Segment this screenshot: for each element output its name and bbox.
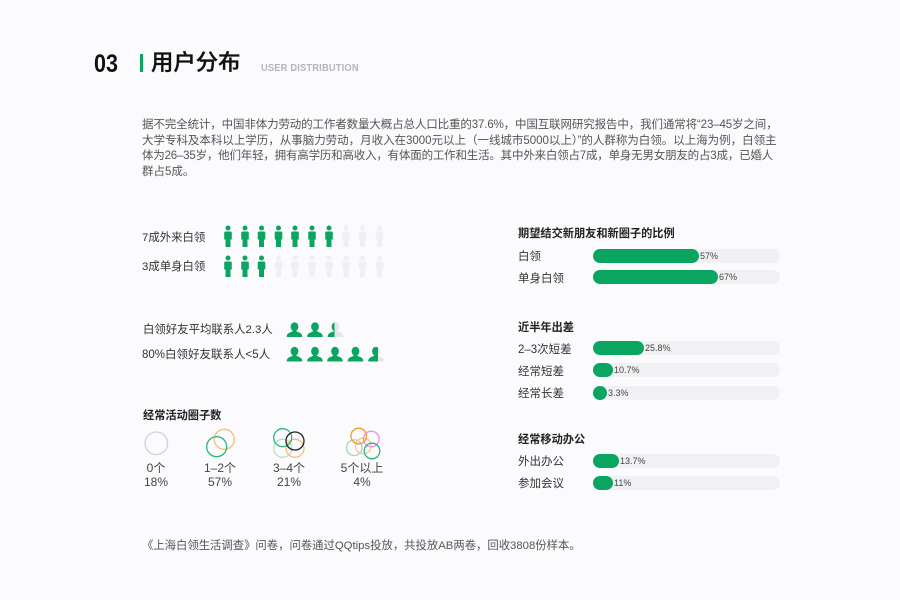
intro paragraph: 大学专科及本科以上学历，从事脑力劳动，月收入在3000元以上（一线城市5000以上）”的人群称为白领。以上海为例，白领主 — [142, 135, 777, 147]
stat: one to two groups — [204, 461, 236, 489]
stat: one to two groups: 57% — [208, 475, 232, 489]
heading: business trips: 近半年出差 — [518, 322, 574, 334]
circles: five or more groups — [346, 428, 380, 459]
stat: zero groups — [144, 461, 168, 489]
bar: 10.7% — [593, 363, 780, 377]
stat: three to four groups: 3–4个 — [273, 461, 305, 475]
bar: white-collar 57%: 57% — [700, 251, 718, 261]
label: average contacts: 白领好友平均联系人2.3人 — [143, 324, 273, 336]
circles: one to two groups — [207, 429, 234, 457]
bar: 25.8% — [593, 341, 780, 355]
bar: 3.3% — [593, 386, 780, 400]
pictogram: 3 of 10 single white-collar — [224, 256, 383, 277]
row label: 经常短差 — [518, 366, 564, 378]
bar: single 67%: 67% — [719, 272, 737, 282]
bar: 10.7%: 10.7% — [614, 365, 640, 375]
heading: expectation: 期望结交新朋友和新圈子的比例 — [518, 228, 675, 240]
stat: five or more groups — [341, 461, 383, 489]
heading: circles: 经常活动圈子数 — [143, 410, 221, 422]
row label: 白领 — [518, 251, 541, 263]
intro paragraph: 据不完全统计，中国非体力劳动的工作者数量大概占总人口比重的37.6%，中国互联网研究报告中，我们通常将“23–45岁之间， — [142, 119, 777, 131]
stat: three to four groups — [273, 461, 305, 489]
stat: five or more groups: 4% — [353, 475, 371, 489]
stat: zero groups: 0个 — [147, 461, 165, 475]
bar: 3.3%: 3.3% — [608, 388, 629, 398]
intro paragraph: 体为26–35岁，他们年轻，拥有高学历和高收入，有体面的工作和生活。其中外来白领占7成，单身无男女朋友的占3成，已婚人 — [142, 150, 773, 162]
stat: five or more groups: 5个以上 — [341, 461, 383, 475]
bar: 11%: 11% — [614, 478, 631, 488]
intro paragraph — [142, 118, 777, 178]
bar: 13.7%: 13.7% — [620, 456, 646, 466]
bar: 11% — [593, 476, 780, 490]
label: contacts under five: 80%白领好友联系人<5人 — [142, 349, 270, 361]
circles: zero groups — [145, 432, 168, 455]
title accent bar — [140, 54, 143, 72]
row label: 参加会议 — [518, 478, 564, 490]
bar: single 67% — [593, 270, 780, 284]
heading: mobile work: 经常移动办公 — [518, 434, 585, 446]
circles: three to four groups — [274, 429, 304, 457]
intro paragraph: 群占5成。 — [142, 166, 194, 178]
source note: 《上海白领生活调查》问卷，问卷通过QQtips投放，共投放AB两卷，回收3808份样本。 — [142, 540, 581, 552]
pictogram: 80 percent under 5 contacts — [287, 347, 384, 362]
pictogram: 7 of 10 migrant white-collar — [224, 226, 383, 247]
row label: 经常长差 — [518, 388, 564, 400]
label: single: 3成单身白领 — [142, 261, 205, 273]
row label: 外出办公 — [518, 456, 564, 468]
bar: white-collar 57% — [593, 249, 780, 263]
section number: 03 — [94, 50, 118, 78]
bar: 25.8%: 25.8% — [645, 343, 671, 353]
row label: 单身白领 — [518, 273, 564, 285]
stat: one to two groups: 1–2个 — [204, 461, 236, 475]
bar: 13.7% — [593, 454, 780, 468]
pictogram: average 2.3 contacts — [287, 322, 343, 337]
english subtitle: USER DISTRIBUTION — [261, 63, 359, 74]
title: 用户分布 — [151, 50, 241, 75]
label: migrant: 7成外来白领 — [142, 232, 205, 244]
row label: 2–3次短差 — [518, 344, 572, 356]
stat: zero groups: 18% — [144, 475, 168, 489]
stat: three to four groups: 21% — [277, 475, 301, 489]
